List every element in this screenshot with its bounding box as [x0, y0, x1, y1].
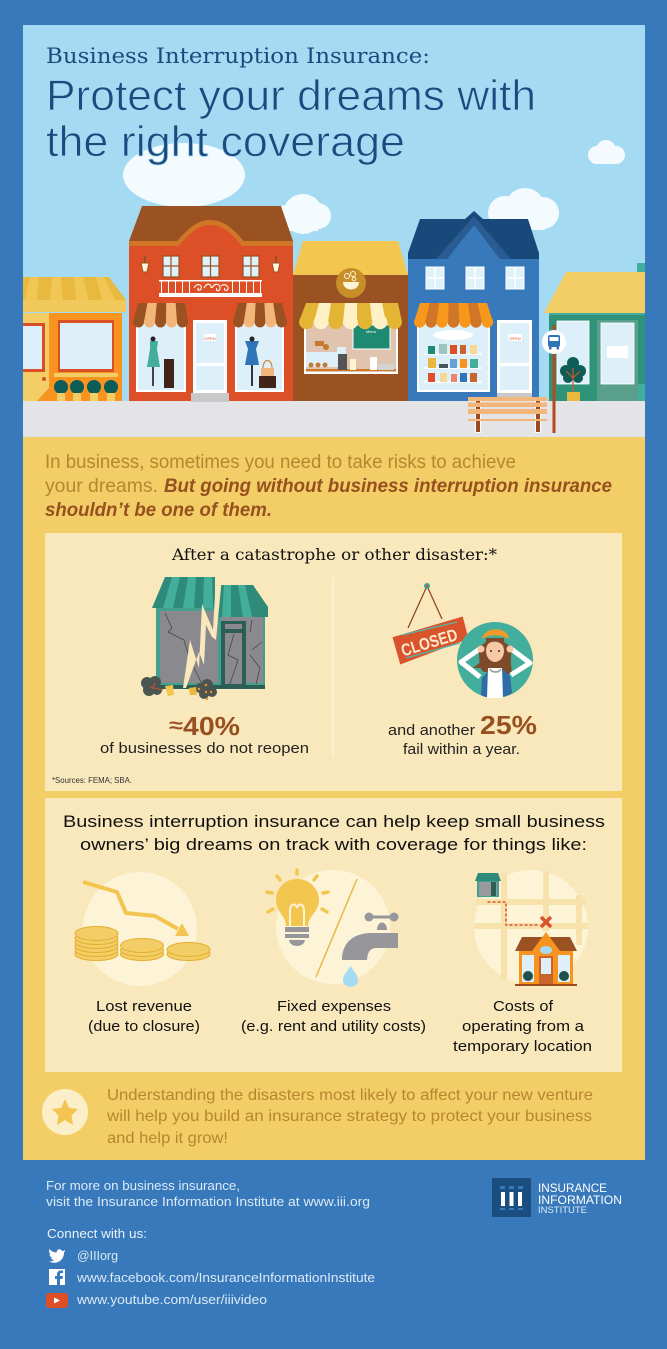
title: Business Interruption Insurance: — [46, 44, 430, 68]
tree — [560, 357, 586, 401]
social: twitter: @IIIorg — [77, 1248, 118, 1263]
icon: lightbulb and faucet — [267, 870, 398, 987]
label: lost revenue: Lost revenue — [96, 998, 192, 1015]
label: temporary location costs: Costs of — [493, 998, 554, 1015]
building: orange shop — [23, 277, 126, 401]
label: temporary location costs: operating from a — [462, 1018, 585, 1035]
windows upper — [163, 256, 259, 277]
building: red boutique: OPEN — [204, 336, 216, 341]
label: fixed expenses — [241, 998, 426, 1035]
panel: after a catastrophe — [45, 533, 622, 791]
stat: 40%: of businesses do not reopen — [100, 740, 309, 757]
logo: Insurance Information Institute: INSTITUTE — [538, 1205, 587, 1215]
closing text: will help you build an insurance strategy to protect your business — [106, 1108, 592, 1125]
footer: more information — [46, 1178, 370, 1209]
label: lost revenue — [88, 998, 200, 1035]
building: red boutique — [129, 206, 293, 402]
intro text — [45, 452, 612, 521]
intro text: In business, sometimes you need to take risks to achieve — [45, 452, 516, 473]
building: green shop — [544, 263, 645, 401]
icon: lost revenue coins — [75, 872, 210, 986]
intro text: But going without business interruption insurance — [164, 476, 612, 497]
building: blue bookshop — [408, 211, 539, 401]
footer: more information: For more on business insurance, — [46, 1178, 240, 1193]
bench — [468, 397, 547, 433]
building: cafe: Menu — [366, 329, 376, 334]
icon: closed sign — [392, 583, 469, 665]
label: fixed expenses: (e.g. rent and utility costs) — [241, 1018, 426, 1035]
sidewalk — [23, 401, 645, 437]
social: youtube: www.youtube.com/user/iiivideo — [76, 1292, 267, 1307]
title: Protect your dreams with — [46, 72, 536, 120]
lamps — [141, 263, 280, 272]
footnote: sources: *Sources: FEMA; SBA. — [52, 775, 132, 785]
label: fixed expenses: Fixed expenses — [277, 998, 391, 1015]
icon: temporary location map — [474, 870, 588, 986]
closing text: Understanding the disasters most likely to affect your new venture — [107, 1087, 593, 1104]
clouds — [123, 140, 625, 234]
icon: worried woman — [457, 622, 533, 698]
label: lost revenue: (due to closure) — [88, 1018, 200, 1035]
heading: After a catastrophe or other disaster:* — [171, 545, 497, 564]
label: temporary location costs — [453, 998, 592, 1055]
intro text: your dreams. — [45, 476, 158, 497]
logo: Insurance Information Institute: INFORMATION — [538, 1193, 622, 1207]
stat: 40%: ≈ — [169, 715, 183, 737]
panel: yellow body — [23, 437, 645, 1160]
logo: Insurance Information Institute — [492, 1178, 622, 1217]
building: cafe — [293, 241, 408, 401]
icon: closed sign: CLOSED — [399, 625, 460, 660]
logo: Insurance Information Institute: INSURANCE — [538, 1181, 607, 1195]
panel: sky header with street scene — [23, 25, 645, 437]
stat: 40%: 40% — [183, 711, 240, 741]
connect with us: Connect with us: — [47, 1226, 147, 1241]
bus stop sign — [542, 325, 566, 433]
title: the right coverage — [46, 118, 405, 166]
awnings — [133, 303, 287, 328]
stat: 25%: 25% — [480, 710, 537, 740]
panel: coverage — [45, 798, 622, 1072]
social: facebook: www.facebook.com/InsuranceInformationInstitute — [76, 1270, 375, 1285]
balcony — [159, 280, 262, 297]
footer: more information: visit the Insurance Information Institute at www.iii.org — [46, 1194, 370, 1209]
building: blue bookshop: OPEN — [509, 336, 521, 341]
icon: star badge — [42, 1089, 88, 1135]
icon: damaged storefront — [141, 577, 268, 700]
stat: 25% — [388, 710, 537, 758]
stat: 40% — [100, 711, 309, 757]
closing text: and help it grow! — [107, 1130, 228, 1147]
heading: Business interruption insurance can help keep small business — [63, 813, 605, 831]
stat: 25%: and another — [388, 722, 475, 739]
stat: 25%: fail within a year. — [403, 741, 520, 758]
label: temporary location costs: temporary location — [453, 1038, 592, 1055]
title — [46, 44, 536, 166]
heading — [63, 813, 605, 854]
mannequins and goods — [147, 341, 160, 367]
intro text: shouldn’t be one of them. — [45, 500, 272, 521]
heading: owners’ big dreams on track with coverage for things like: — [80, 836, 587, 854]
social: twitter — [49, 1248, 118, 1263]
closing text — [106, 1087, 593, 1147]
shop windows — [137, 324, 283, 391]
door — [193, 320, 227, 393]
